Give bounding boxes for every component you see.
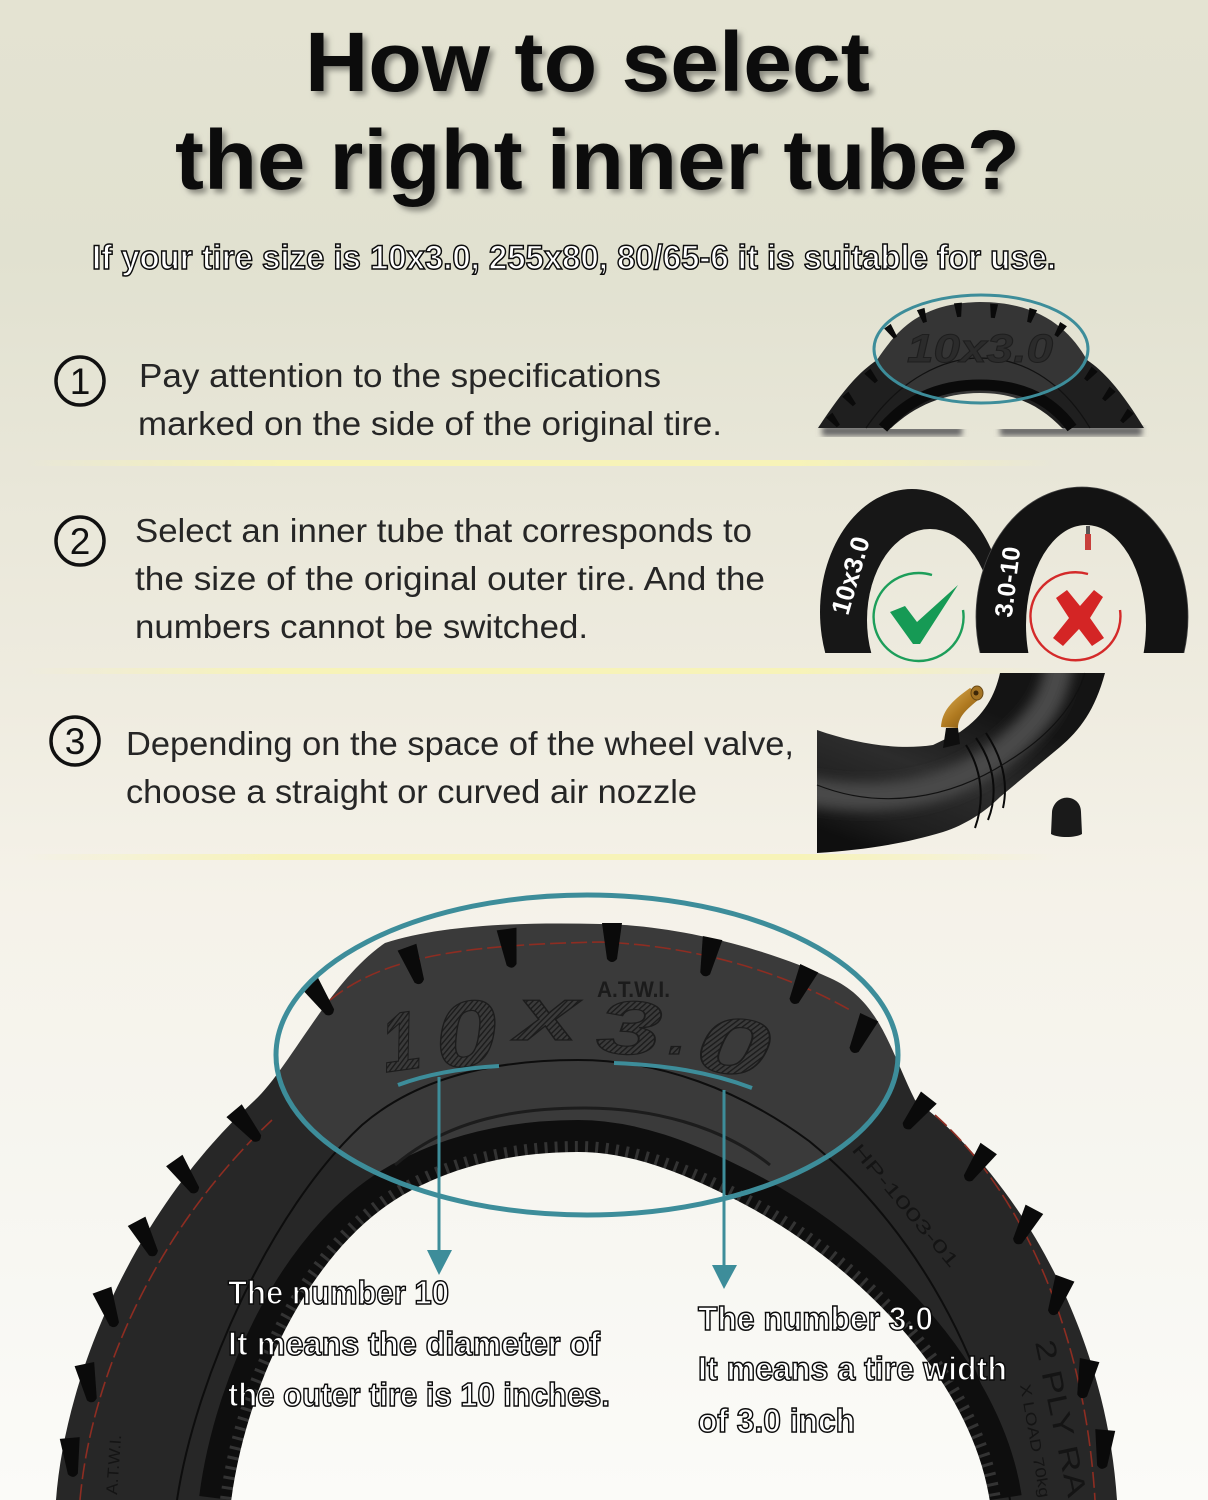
teal ellipse — [276, 895, 898, 1215]
tube 3.0-10: 3.0-10 — [990, 545, 1026, 619]
step 1 number: 1 — [70, 361, 90, 402]
valve cap — [1051, 798, 1082, 837]
embossed 10x3.0 marking: . — [668, 1009, 686, 1065]
annotation: number 10 — [228, 1274, 610, 1413]
shadow under tire — [822, 426, 962, 436]
sidewall marking HP-1003-01: HP-1003-01 — [848, 1140, 963, 1271]
step 3 image: tube with curved valve — [816, 672, 1105, 853]
tire body — [818, 302, 1144, 428]
tire opening — [890, 393, 1063, 429]
cross badge — [1030, 572, 1120, 660]
step 2 image: correct and wrong tubes — [820, 486, 1188, 662]
step 3 text — [126, 725, 794, 810]
subtitle: If your tire size is 10x3.0, 255x80, 80/65-6 it is suitable for use. — [92, 239, 1056, 277]
bracket: width — [614, 1063, 752, 1088]
step 1 text — [138, 357, 722, 442]
annotation: number 3.0: It means a tire width — [698, 1350, 1007, 1387]
title: the right inner tube? — [179, 117, 1024, 211]
step 1 text: Pay attention to the specifications — [139, 357, 661, 394]
embossed 10x3.0 marking: 3 — [595, 984, 664, 1073]
title: How to select — [309, 19, 874, 113]
tire body — [56, 923, 1117, 1500]
annotation: number 3.0 — [698, 1300, 1007, 1439]
tube seam lines — [966, 733, 1005, 828]
step 1 text: marked on the side of the original tire. — [138, 405, 722, 442]
title: How to select — [305, 15, 870, 109]
arrow: number 3.0 — [712, 1090, 737, 1289]
title: the right inner tube? — [175, 113, 1020, 207]
main tire diagram — [56, 895, 1117, 1500]
valve stem — [941, 686, 983, 748]
step 1 image: tire with marked size — [818, 295, 1144, 436]
step 2 text — [135, 512, 765, 645]
embossed size text: 10x3.0 — [907, 327, 1053, 371]
tread notches — [826, 303, 1134, 429]
step 2 text: numbers cannot be switched. — [135, 608, 588, 645]
step 3 number: 3 — [65, 721, 85, 762]
annotation: number 10: It means the diameter of — [228, 1325, 601, 1362]
sidewall marking 2 PLY RA: 2 PLY RA — [1029, 1337, 1093, 1500]
tube 10x3.0: 10x3.0 — [825, 533, 876, 618]
divider 1 — [25, 460, 1055, 466]
step 2 text: the size of the original outer tire. And the — [135, 560, 765, 597]
tube body — [817, 673, 1105, 853]
tread notches — [60, 923, 1115, 1478]
sidewall marking left: A.T.W.I. — [104, 1434, 125, 1495]
step 1 number — [56, 357, 104, 405]
sidewall ridges and inner band — [866, 358, 1090, 428]
annotation: number 10: the outer tire is 10 inches. — [228, 1376, 610, 1413]
tube highlight — [800, 660, 1060, 797]
red tread lines — [80, 942, 1095, 1500]
embossed 10x3.0 marking: 0 — [691, 997, 776, 1095]
magnified lens shading — [280, 924, 896, 1182]
step 3 text: choose a straight or curved air nozzle — [126, 773, 697, 810]
divider 3 — [25, 854, 1055, 860]
tube 3.0-10 — [976, 486, 1188, 653]
embossed 10x3.0 marking: 1 — [375, 993, 426, 1090]
tire opening — [231, 1152, 990, 1500]
arrow: number 10 — [427, 1077, 452, 1275]
divider 2 — [25, 668, 1055, 674]
step 3 text: Depending on the space of the wheel valve, — [126, 725, 794, 762]
tube rings — [820, 486, 1188, 653]
step 2 text: Select an inner tube that corresponds to — [135, 512, 752, 549]
title — [175, 15, 1024, 211]
step 2 number: 2 — [70, 521, 90, 562]
embossed 10x3.0 marking: 0 — [430, 979, 501, 1088]
upper rim ridge — [395, 1108, 770, 1165]
red valve — [1086, 526, 1090, 534]
sidewall ridge — [177, 1060, 1010, 1500]
bracket: diameter — [398, 1066, 499, 1085]
tube 10x3.0 — [820, 489, 992, 653]
embossed 10x3.0 marking: x — [510, 972, 583, 1056]
lens highlight — [878, 302, 1085, 398]
annotation: number 3.0: of 3.0 inch — [698, 1402, 855, 1439]
small A.T.W.I. marking: A.T.W.I. — [597, 977, 670, 1002]
annotation: number 3.0: The number 3.0 — [698, 1300, 933, 1337]
inner pebbled band — [231, 1152, 990, 1500]
annotation: number 10: The number 10 — [228, 1274, 449, 1311]
teal ellipse — [874, 295, 1088, 403]
embossed 10x3.0 marking — [375, 972, 776, 1095]
step 2 number — [56, 517, 104, 565]
check mark badge — [874, 573, 964, 661]
sidewall marking load: X LOAD 70kg — [1016, 1383, 1053, 1499]
step 3 number — [51, 717, 99, 765]
